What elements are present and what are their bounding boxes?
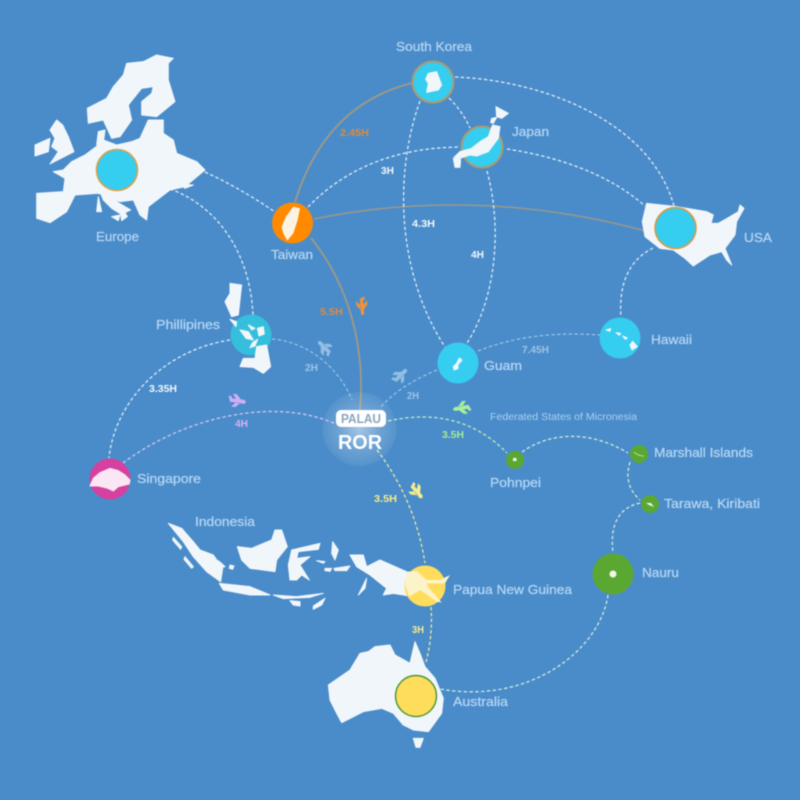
duration: Phillipines to Palau: 2H [305, 362, 318, 374]
map: Europe [35, 55, 205, 223]
label: Papua New Guinea: Papua New Guinea [453, 582, 573, 597]
map: Hawaii [606, 329, 637, 350]
route: South Korea to Japan [449, 98, 470, 128]
map: Tarawa [646, 503, 654, 507]
marker: Singapore [90, 458, 130, 500]
duration: Taiwan to South Korea: 2.45H [340, 127, 369, 139]
duration: Japan to Guam: 4H [471, 249, 484, 261]
Australia [328, 642, 509, 747]
marker: Europe [96, 150, 138, 190]
route: Papua New Guinea to Australia [426, 607, 431, 662]
map: Japan [453, 107, 508, 167]
map: Phillipines [225, 283, 271, 373]
duration: Papua New Guinea to Australia: 3H [412, 624, 424, 636]
label: Phillipines: Phillipines [156, 317, 221, 332]
map: Indonesia [168, 523, 413, 609]
route: Taiwan to USA [314, 205, 653, 233]
label: Taiwan: Taiwan [271, 247, 313, 262]
label: Nauru: Nauru [642, 565, 679, 580]
label: USA: USA [744, 230, 772, 245]
route: USA to Hawaii [621, 248, 653, 317]
icon: yellow airplane [406, 480, 427, 502]
marker: South Korea [412, 62, 454, 102]
label: Europe: Europe [96, 229, 139, 244]
Singapore [90, 458, 201, 500]
Europe [35, 55, 205, 244]
duration: South Korea to Guam: 4.3H [412, 218, 435, 230]
Japan [453, 107, 549, 168]
label: Pohnpei: Pohnpei [490, 475, 541, 490]
map: Nauru [610, 570, 616, 578]
Hawaii [600, 318, 692, 358]
route: Guam to Hawaii [478, 334, 600, 351]
marker: Australia [396, 676, 436, 716]
route: Taiwan to Japan [308, 147, 460, 207]
marker: Taiwan [272, 202, 313, 244]
route: Europe to Phillipines [170, 189, 253, 315]
route: Taiwan to South Korea [295, 83, 412, 202]
duration: Taiwan to Palau: 5.5H [320, 306, 343, 318]
label: Marshall Islands: Marshall Islands [654, 445, 754, 460]
duration: Guam to Hawaii: 7.45H [522, 344, 549, 356]
route: Tarawa to Nauru [612, 503, 640, 553]
hub glow [322, 392, 396, 466]
Pohnpei [490, 451, 541, 490]
route: Europe to Taiwan [205, 172, 275, 212]
route: Pohnpei to Marshall Islands [522, 436, 628, 453]
route: South Korea to Guam [404, 101, 445, 347]
route: Guam to Palau [380, 370, 437, 408]
map: Papua New Guinea [405, 571, 450, 603]
label: Australia: Australia [453, 694, 509, 709]
South Korea [396, 39, 473, 102]
icon: green airplane [452, 400, 472, 416]
Phillipines [156, 283, 272, 373]
map: Pohnpei [513, 458, 516, 461]
route: Japan to USA [507, 149, 645, 206]
marker: Nauru [592, 554, 634, 594]
label: Singapore: Singapore [137, 471, 201, 486]
Tarawa, Kiribati [641, 495, 760, 513]
duration: Palau to Pohnpei: 3.5H [442, 429, 464, 441]
label: Guam: Guam [484, 358, 522, 373]
route: Nauru to Australia [440, 595, 608, 692]
map: Taiwan [282, 207, 300, 241]
Guam [438, 342, 522, 384]
airplanes [227, 296, 472, 502]
Marshall Islands [630, 445, 754, 463]
route: Palau to Papua New Guinea [377, 450, 425, 563]
icon: blue airplane Phillipines [314, 337, 336, 359]
icon: blue airplane Guam [389, 365, 411, 387]
map: Marshall Islands [634, 452, 644, 456]
duration: Palau to Papua New Guinea: 3.5H [374, 493, 397, 505]
marker: Phillipines [230, 314, 272, 356]
marker: USA [655, 208, 696, 248]
route: Palau to Pohnpei [388, 417, 507, 453]
label: Hawaii: Hawaii [651, 332, 692, 347]
label: Federated States of Micronesia: Federated States of Micronesia [490, 412, 637, 423]
marker: Marshall Islands [630, 445, 648, 463]
route: Japan to Guam [467, 171, 495, 343]
Indonesia and Papua New Guinea [168, 514, 573, 609]
map: Australia [328, 642, 443, 747]
label: South Korea: South Korea [396, 39, 473, 54]
map: Guam [453, 358, 462, 370]
badge: PALAU: PALAU [341, 411, 381, 426]
map: USA [642, 203, 744, 266]
route: Phillipines to Singapore [109, 340, 230, 458]
route: Singapore to Palau [123, 412, 336, 463]
marker: Tarawa [641, 495, 659, 513]
map: Singapore [90, 468, 130, 491]
map: South Korea [426, 72, 442, 92]
label: Tarawa, Kiribati: Tarawa, Kiribati [664, 496, 760, 511]
marker: Pohnpei [506, 451, 524, 469]
route: Phillipines to Palau [272, 339, 352, 400]
Nauru [592, 554, 679, 594]
duration: Guam to Palau: 2H [407, 390, 419, 402]
marker: Japan [462, 126, 502, 168]
flight routes [109, 77, 674, 692]
icon: purple airplane [227, 393, 247, 409]
icon: orange airplane [356, 296, 368, 316]
marker: Guam [438, 342, 478, 384]
USA [642, 203, 772, 266]
Taiwan [271, 202, 313, 262]
route: South Korea to USA [455, 77, 674, 206]
hub: Palau ROR [322, 392, 396, 466]
duration: Phillipines to Singapore: 3.35H [149, 383, 177, 395]
label: Japan: Japan [512, 124, 549, 139]
flight durations [149, 127, 549, 636]
marker: Papua New Guinea [404, 566, 446, 606]
duration: Singapore to Palau: 4H [235, 418, 248, 430]
route: Taiwan to Palau [311, 238, 361, 410]
route: Marshall Islands to Tarawa [628, 462, 640, 500]
label: Indonesia: Indonesia [195, 514, 256, 529]
marker: Hawaii [600, 318, 640, 358]
duration: Taiwan to Japan: 3H [381, 165, 394, 177]
code: ROR: ROR [338, 432, 383, 454]
